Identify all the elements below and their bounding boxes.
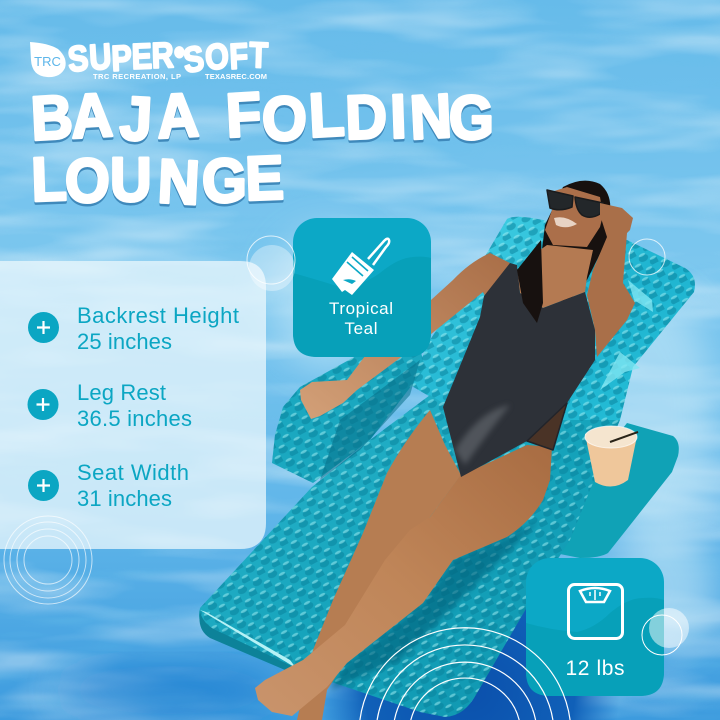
neck and chest — [517, 245, 593, 308]
drink cup — [585, 426, 638, 487]
swimsuit — [443, 263, 595, 477]
spec: backrest height — [28, 303, 239, 354]
float: seat shadow under legs — [330, 520, 540, 690]
weight badge: 12 lbs — [566, 657, 624, 680]
spec: leg rest — [28, 380, 192, 431]
swimsuit sheen — [455, 405, 510, 465]
bubble: backrest — [629, 239, 665, 275]
logo wordmark: SUPER•SOFT — [66, 33, 269, 82]
spec: leg rest: Leg Rest — [77, 380, 166, 405]
icon: paint brush — [332, 239, 389, 295]
colour badge: Tropical — [329, 299, 393, 318]
ripple: bottom — [360, 628, 570, 720]
hair strand — [517, 240, 543, 323]
arm: left — [300, 253, 510, 419]
float lounge — [199, 217, 695, 717]
spec: seat width: 31 inches — [77, 486, 172, 511]
woman — [255, 181, 635, 720]
title text: LOUNGE — [30, 143, 285, 218]
logo — [30, 33, 269, 82]
title text — [29, 79, 494, 218]
logo: TRC — [34, 54, 61, 69]
sunglasses — [547, 190, 603, 217]
float: right armrest table — [550, 423, 679, 558]
specs panel — [0, 261, 266, 549]
title — [29, 79, 494, 220]
float: seat and leg rest — [199, 395, 620, 717]
title shadow — [29, 82, 494, 220]
arm: raised — [587, 203, 635, 357]
float: left armrest — [272, 348, 425, 483]
logo tagline: TRC RECREATION, LP — [93, 72, 181, 81]
spec: seat width — [28, 460, 189, 511]
leg: near — [255, 445, 552, 716]
spec: leg rest: 36.5 inches — [77, 406, 192, 431]
swimsuit side straps — [527, 403, 567, 450]
bubble: colour badge — [247, 236, 295, 291]
hair — [517, 181, 610, 323]
logo drop — [30, 42, 66, 77]
bubble: weight badge — [642, 608, 689, 655]
title text: BAJA FOLDING — [29, 79, 494, 154]
colour badge — [293, 218, 431, 357]
title shadow: LOUNGE — [30, 145, 285, 220]
spec: backrest height: 25 inches — [77, 329, 172, 354]
weight badge — [526, 558, 664, 696]
colour badge: Teal — [344, 319, 378, 338]
logo: TEXASREC.COM — [205, 72, 267, 81]
mouth — [554, 217, 577, 227]
spec: backrest height: Backrest Height — [77, 303, 239, 328]
head — [545, 187, 603, 247]
leg: far — [297, 410, 461, 720]
ripple: left — [4, 516, 92, 604]
spec: seat width: Seat Width — [77, 460, 189, 485]
title shadow: BAJA FOLDING — [29, 82, 494, 157]
float: backrest — [410, 217, 695, 425]
icon: scale — [568, 584, 622, 638]
